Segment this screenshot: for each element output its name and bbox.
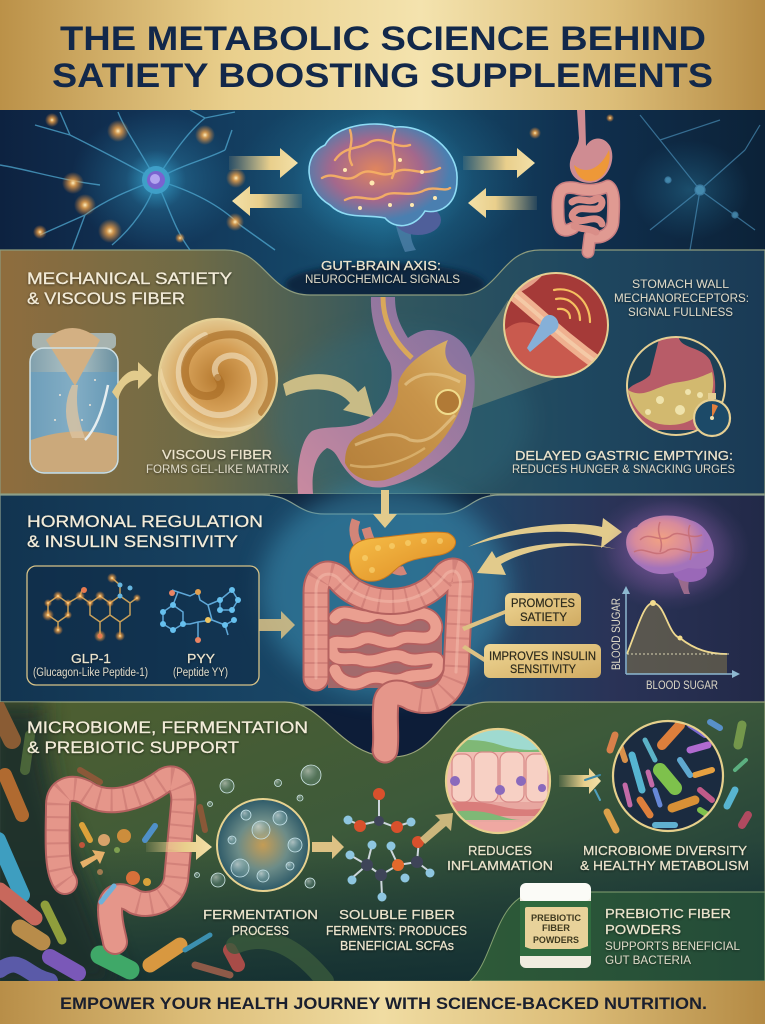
label: fermentation process: PROCESS [232,923,289,938]
label: gut-brain axis: GUT-BRAIN AXIS: [321,258,441,273]
callout: improves insulin sensitivity [462,644,601,678]
label: delayed gastric emptying: REDUCES HUNGER & SNACKING URGES [512,464,735,476]
icon: SCFA molecules [344,788,434,902]
heading: microbiome: MICROBIOME, FERMENTATION [27,718,308,737]
icon: large intestine and pancreas [316,520,460,750]
axis label: x: BLOOD SUGAR [646,680,718,692]
callout: promotes satiety [462,593,581,631]
heading: microbiome: & PREBIOTIC SUPPORT [27,738,239,757]
icon: background bacteria [0,705,325,981]
title: SATIETY BOOSTING SUPPLEMENTS [52,57,713,95]
icon: colon [316,571,460,750]
icon: digestive tract small [558,110,614,252]
icon: small intestine [328,610,442,688]
icon: beam to magnifier [448,300,560,414]
icon: gut lining circle [444,728,552,834]
footer banner [0,981,765,1024]
label: stomach wall mechanoreceptors: SIGNAL FULLNESS [628,307,733,319]
heading: hormonal regulation [27,512,263,551]
panel: gut-brain axis background [0,90,765,307]
label: reduces inflammation: REDUCES [468,843,532,858]
arrow: stomach down to gut [373,490,397,528]
icon: brain pink [605,500,735,600]
label: soluble fiber: FERMENTS: PRODUCES [326,923,467,938]
label: PYY: PYY [187,651,215,666]
arrow: colon to fermentation [146,834,212,860]
icon: stopwatch [694,393,730,436]
label: stomach wall mechanoreceptors: STOMACH WALL [632,279,730,291]
label: stomach wall mechanoreceptors: MECHANORECEPTORS: [614,293,749,305]
icon: fermentation sphere [217,799,309,891]
heading: mechanical satiety: MECHANICAL SATIETY [27,269,232,288]
icon: PYY molecule [160,587,241,643]
icon: pancreas [349,520,456,581]
icon: stomach [298,297,475,494]
heading: mechanical satiety [27,269,232,308]
arrow: gut to brain [468,188,537,218]
panel: hormonal regulation background [0,485,765,705]
label: delayed gastric emptying [512,448,735,476]
callout: improves insulin sensitivity: IMPROVES INSULIN [489,651,596,663]
title: THE METABOLIC SCIENCE BEHIND [60,20,706,58]
arrow: brain to gut [463,148,535,178]
icon: right neural network [640,115,760,250]
panel: hormones box [27,566,259,685]
label: soluble fiber: SOLUBLE FIBER [339,907,455,922]
callout: promotes satiety: PROMOTES [511,598,575,610]
arrow: neuron to brain [229,148,298,178]
label: PYY: (Peptide YY) [173,667,228,679]
icon: delayed gastric emptying inset [625,335,730,436]
icon: supplement jar: FIBER [542,923,570,934]
label: soluble fiber: BENEFICIAL SCFAs [340,938,454,953]
arrow: brain to gut [477,543,616,575]
icon: microbiome sphere [613,721,723,831]
heading: hormonal regulation: & INSULIN SENSITIVITY [27,532,238,551]
heading: mechanical satiety: & VISCOUS FIBER [27,289,185,308]
label: GLP-1: (Glucagon-Like Peptide-1) [33,667,148,679]
arrow: gut to brain [468,518,622,548]
heading: hormonal regulation: HORMONAL REGULATION [27,512,263,531]
icon: floating bubbles [194,765,321,888]
label: prebiotic fiber powders: GUT BACTERIA [605,955,691,967]
axis label: y: BLOOD SUGAR [611,598,623,670]
icon: supplement jar: PREBIOTIC [531,913,581,924]
label: microbiome diversity: & HEALTHY METABOLISM [580,858,749,873]
label: delayed gastric emptying: DELAYED GASTRIC EMPTYING: [515,448,733,463]
callout: improves insulin sensitivity: SENSITIVITY [510,664,576,676]
label: viscous fiber: VISCOUS FIBER [162,447,272,462]
label: gut-brain axis [305,258,460,286]
label: viscous fiber [146,447,289,476]
label: prebiotic fiber powders: POWDERS [605,922,681,937]
label: microbiome diversity [580,843,749,873]
arrow: fermentation to SCFAs [312,835,344,859]
icon: supplement jar [520,883,591,968]
label: GLP-1 [33,651,148,679]
panel: prebiotic product background [470,892,765,981]
label: stomach wall mechanoreceptors [614,279,749,319]
label: fermentation process: FERMENTATION [203,907,318,922]
callout: promotes satiety: SATIETY [520,612,567,624]
icon: jar with powder [30,328,118,473]
arrow: brain to neuron [232,186,302,216]
label: prebiotic fiber powders [605,906,741,967]
label: prebiotic fiber powders: PREBIOTIC FIBER [605,906,731,921]
icon: glowing brain [293,110,473,252]
label: fermentation process [203,907,318,938]
arrow: jar to gel [112,362,152,400]
arrow: SCFAs to gut lining [420,813,453,844]
label: reduces inflammation [447,843,553,873]
label: PYY [173,651,228,679]
icon: mechanoreceptor inset [503,272,609,378]
label: GLP-1: GLP-1 [71,651,111,666]
icon: GLP-1 molecule [42,573,141,642]
label: microbiome diversity: MICROBIOME DIVERSITY [583,843,747,858]
arrow: gel to stomach [283,374,374,418]
heading: microbiome [27,718,308,757]
icon: surrounding microbes [585,722,748,830]
title [52,20,713,95]
icon: supplement jar: POWDERS [533,935,579,946]
footer banner: EMPOWER YOUR HEALTH JOURNEY WITH SCIENCE-BACKED NUTRITION. [60,994,707,1013]
chart: blood sugar curve [611,586,740,692]
label: reduces inflammation: INFLAMMATION [447,858,553,873]
panel: mechanical satiety background [0,250,765,520]
icon: viscous fiber swirl [159,319,277,437]
label: gut-brain axis: NEUROCHEMICAL SIGNALS [305,274,460,286]
header banner [0,0,765,110]
icon: neuron network [0,110,614,250]
label: prebiotic fiber powders: SUPPORTS BENEFICIAL [605,941,741,953]
label: soluble fiber [326,907,467,953]
label: viscous fiber: FORMS GEL-LIKE MATRIX [146,464,289,476]
arrow: gut lining to microbiome [559,768,601,794]
icon: colon with bacteria [58,778,183,942]
panel: microbiome background [0,702,765,990]
arrow: hormones to gut [259,611,295,639]
